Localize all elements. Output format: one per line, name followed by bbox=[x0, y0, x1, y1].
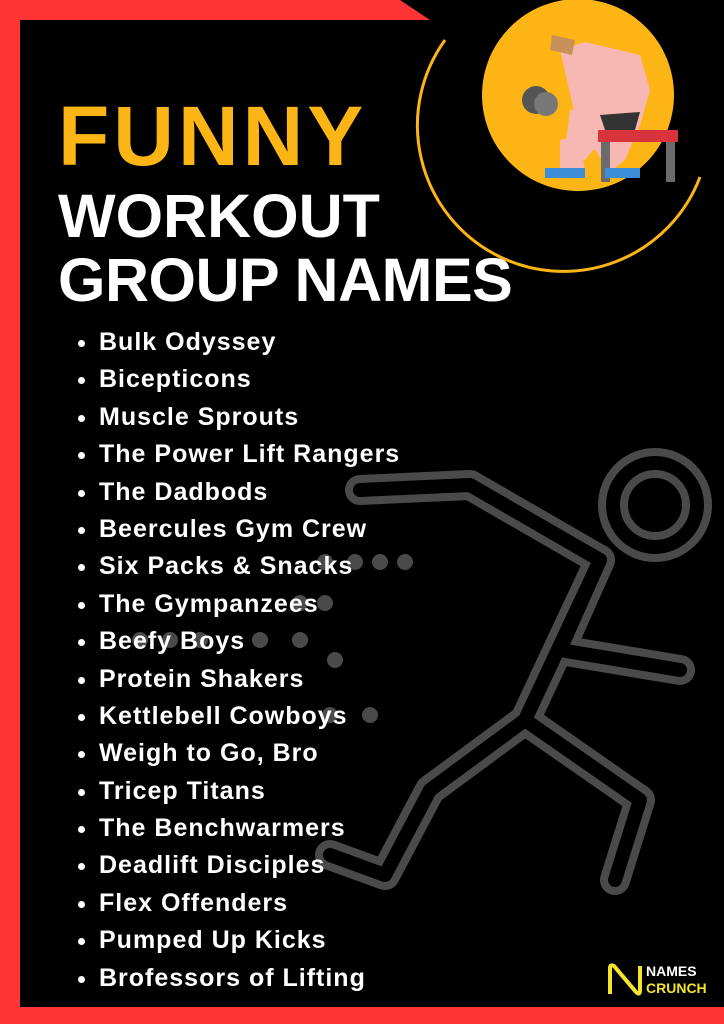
name list: Deadlift Disciples bbox=[99, 851, 325, 879]
name list: Beercules Gym Crew bbox=[99, 515, 367, 543]
name list: Flex Offenders bbox=[99, 889, 288, 917]
name list: Tricep Titans bbox=[99, 777, 266, 805]
name list: Bicepticons bbox=[99, 365, 252, 393]
title: GROUP NAMES: GROUP NAMES bbox=[58, 246, 512, 314]
name list: Bulk Odyssey bbox=[99, 328, 276, 356]
name list: The Gympanzees bbox=[99, 590, 319, 618]
logo: Names Crunch: NAMES bbox=[646, 963, 697, 979]
name list: Pumped Up Kicks bbox=[99, 926, 327, 954]
title: FUNNY: FUNNY bbox=[58, 89, 367, 183]
name list: The Power Lift Rangers bbox=[99, 440, 400, 468]
icon: yellow circle with bodybuilder bbox=[416, 0, 702, 273]
name list: Protein Shakers bbox=[99, 665, 304, 693]
name list: Kettlebell Cowboys bbox=[99, 702, 348, 730]
logo: Names Crunch: CRUNCH bbox=[646, 980, 707, 996]
title bbox=[58, 89, 512, 314]
name list bbox=[78, 328, 400, 992]
name list: Brofessors of Lifting bbox=[99, 964, 366, 992]
name list: Six Packs & Snacks bbox=[99, 552, 353, 580]
logo: Names Crunch bbox=[608, 963, 707, 996]
name list: Beefy Boys bbox=[99, 627, 245, 655]
name list: The Benchwarmers bbox=[99, 814, 346, 842]
title: WORKOUT: WORKOUT bbox=[58, 182, 380, 250]
name list: The Dadbods bbox=[99, 478, 268, 506]
name list: Muscle Sprouts bbox=[99, 403, 299, 431]
name list: Weigh to Go, Bro bbox=[99, 739, 319, 767]
